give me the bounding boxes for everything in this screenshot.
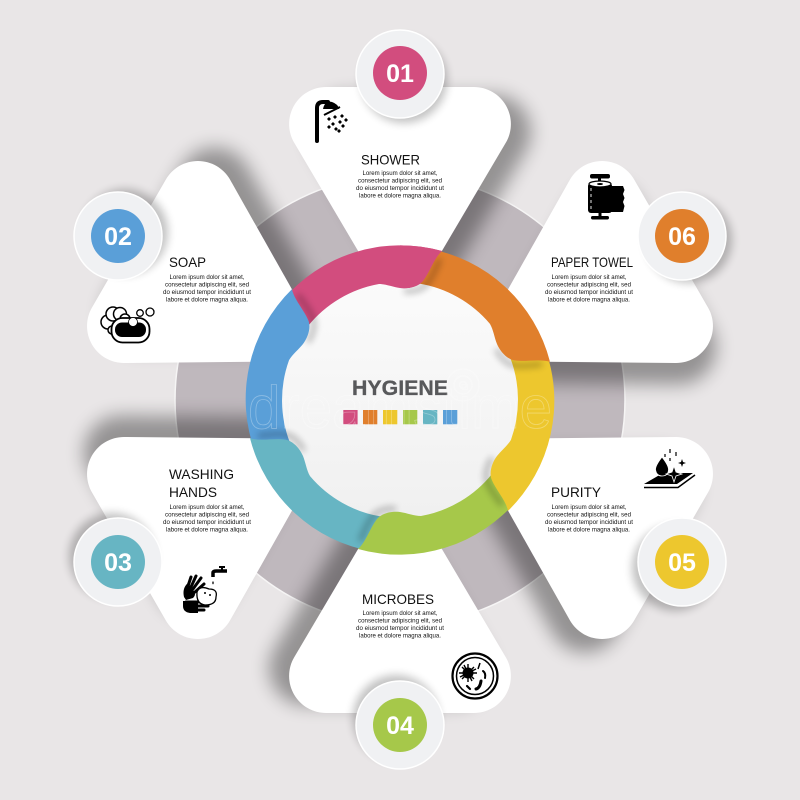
- text block: consectetur adipiscing elit, sed: [165, 512, 250, 518]
- grey outer ring: [175, 175, 625, 625]
- text block: do eiusmod tempor incididunt ut: [163, 519, 251, 526]
- text block: labore et dolore magna aliqua.: [359, 192, 441, 200]
- text block: do eiusmod tempor incididunt ut: [163, 289, 251, 296]
- center disk: [281, 281, 519, 519]
- title: HYGIENE: [352, 377, 448, 400]
- heading: HANDS: [169, 484, 217, 500]
- heading: SHOWER: [361, 152, 420, 168]
- text block: consectetur adipiscing elit, sed: [358, 178, 443, 184]
- panel: shower: [289, 30, 511, 322]
- text block: Lorem ipsum dolor sit amet,: [362, 170, 438, 177]
- heading: [169, 466, 234, 500]
- text block: do eiusmod tempor incididunt ut: [545, 519, 633, 526]
- badge: 05: 05: [668, 549, 696, 577]
- badge: 02: [74, 189, 168, 280]
- segment: yellow: [443, 335, 593, 514]
- icon: washing hands: [183, 567, 227, 613]
- text block: labore et dolore magna aliqua.: [548, 526, 630, 534]
- heading: WASHING: [169, 466, 234, 482]
- icon: soap: [101, 307, 154, 342]
- badge: 04: 04: [386, 712, 414, 740]
- heading: MICROBES: [362, 591, 434, 607]
- badge: 02: 02: [104, 223, 132, 251]
- badge: 06: 06: [668, 223, 696, 251]
- text block: [545, 504, 633, 534]
- text block: labore et dolore magna aliqua.: [359, 632, 441, 640]
- panel: purity: [412, 343, 727, 653]
- card: [289, 87, 511, 322]
- text block: do eiusmod tempor incididunt ut: [356, 625, 444, 632]
- text block: consectetur adipiscing elit, sed: [358, 618, 443, 624]
- card: [73, 147, 388, 457]
- text block: Lorem ipsum dolor sit amet,: [170, 274, 245, 281]
- panel: washing hands: [69, 343, 388, 653]
- text block: [163, 504, 251, 534]
- text block: consectetur adipiscing elit, sed: [547, 512, 632, 518]
- text block: do eiusmod tempor incididunt ut: [545, 289, 633, 296]
- badge: 05: [632, 518, 726, 611]
- heading: PAPER TOWEL: [551, 254, 633, 270]
- text block: Lorem ipsum dolor sit amet,: [170, 504, 245, 511]
- color swatches: [343, 410, 457, 424]
- badge: 06: [638, 192, 732, 283]
- badge: 01: 01: [386, 60, 414, 88]
- text block: labore et dolore magna aliqua.: [548, 296, 630, 304]
- badge: 03: 03: [104, 549, 132, 577]
- segment: pink base: [282, 245, 442, 326]
- text block: labore et dolore magna aliqua.: [166, 296, 248, 304]
- badge: 04: [353, 675, 444, 769]
- text block: do eiusmod tempor incididunt ut: [356, 185, 444, 192]
- text block: labore et dolore magna aliqua.: [166, 526, 248, 534]
- heading: SOAP: [169, 254, 206, 270]
- icon: microbes: [452, 654, 498, 698]
- segment: blue: [207, 286, 357, 465]
- text block: [356, 610, 444, 640]
- panel: soap: [73, 147, 388, 457]
- icon: purity: [644, 449, 695, 488]
- card: [412, 147, 727, 457]
- badge: 03: [69, 513, 162, 606]
- panel: microbes: [289, 478, 511, 769]
- segment: pink: [400, 245, 444, 297]
- segment: orange: [405, 220, 555, 399]
- icon: paper towel: [588, 174, 624, 220]
- text block: consectetur adipiscing elit, sed: [547, 282, 632, 288]
- segment: teal: [245, 401, 395, 580]
- heading: PURITY: [551, 484, 602, 500]
- badge: 01: [356, 30, 447, 123]
- text block: Lorem ipsum dolor sit amet,: [552, 504, 627, 511]
- segment: green: [358, 474, 518, 555]
- colored ring: [246, 245, 554, 555]
- text block: consectetur adipiscing elit, sed: [165, 282, 250, 288]
- text block: [545, 274, 633, 304]
- text block: Lorem ipsum dolor sit amet,: [362, 610, 438, 617]
- text block: Lorem ipsum dolor sit amet,: [552, 274, 627, 281]
- card: [289, 478, 511, 713]
- icon: shower: [317, 102, 348, 141]
- text block: [163, 274, 251, 304]
- petal shadows: [70, 95, 730, 705]
- card: [412, 343, 727, 653]
- text block: [356, 170, 444, 200]
- panel: paper towel: [412, 147, 732, 457]
- card: [73, 343, 388, 653]
- watermark: dreamstime: [248, 374, 552, 441]
